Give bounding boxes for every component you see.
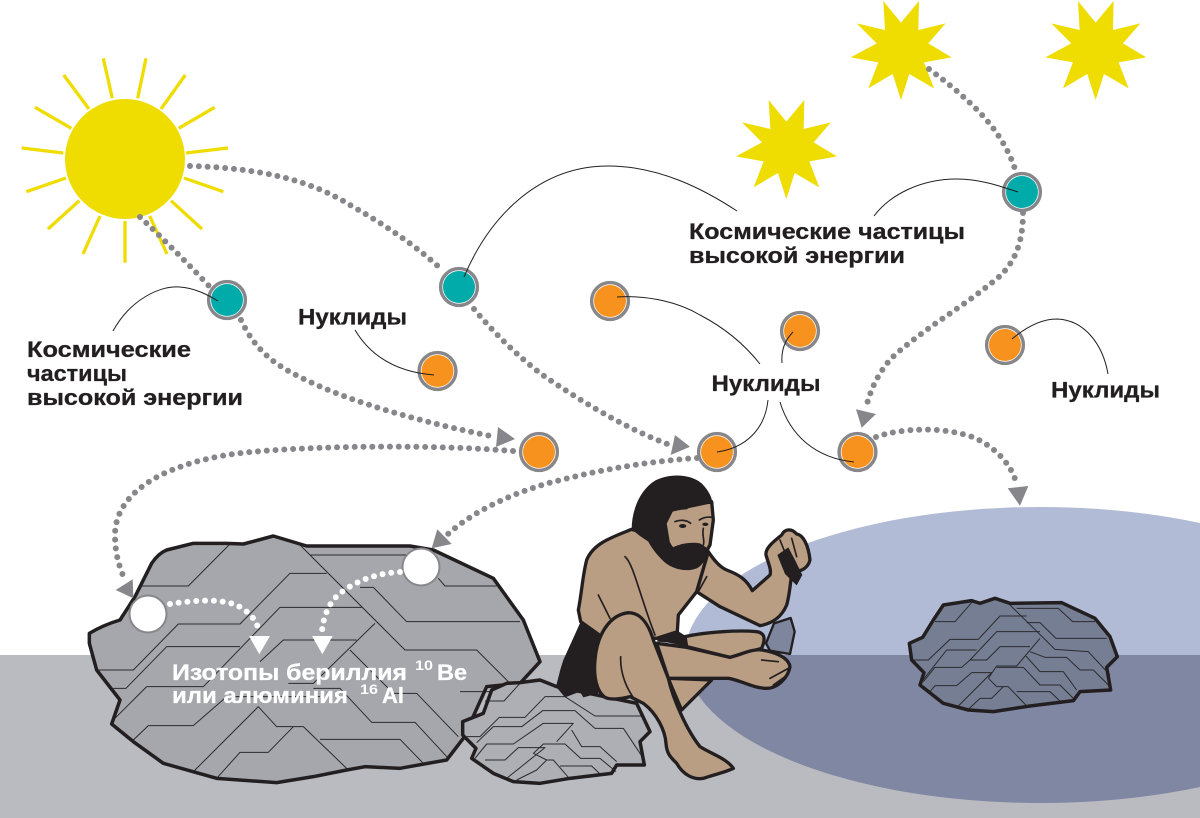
face details — [675, 517, 713, 554]
arrow: to nuclide left — [496, 427, 515, 447]
caveman — [556, 475, 810, 779]
fur loincloth — [556, 622, 602, 697]
front leg — [595, 613, 733, 779]
nuclide 4 — [782, 313, 818, 349]
label: isotopes — [172, 657, 467, 708]
nuclide 7 — [839, 434, 876, 470]
nuclide 3 — [521, 434, 557, 470]
torso — [578, 529, 708, 638]
hand stone — [766, 618, 795, 654]
front arm with hand — [657, 643, 790, 688]
head skin — [665, 502, 713, 560]
particle: teal right — [1004, 174, 1040, 210]
back leg — [668, 678, 712, 710]
dotted path: sun to centre particle — [190, 166, 441, 269]
dotted path: sun to particle — [140, 217, 210, 287]
white arrow right — [312, 636, 333, 654]
label: isotopes: или алюминия — [172, 683, 348, 708]
submerged rock — [909, 598, 1117, 712]
raised arm — [697, 530, 810, 626]
label: cosmic particles right — [689, 219, 965, 268]
label: cosmic particles left: Космические — [27, 337, 191, 362]
waist band — [657, 631, 687, 646]
dotted path: nuclide to lake — [876, 430, 1016, 482]
particle: teal left — [209, 282, 245, 318]
white arrow left — [249, 636, 270, 654]
dotted path: particle to right nuclide — [866, 213, 1023, 408]
label: nuclides centre: Нуклиды — [712, 371, 820, 396]
label: isotopes: Изотопы бериллия — [172, 660, 407, 685]
label: isotopes: 10 — [415, 657, 433, 673]
dotted path: nuclide to rock right — [448, 458, 697, 534]
leader lines — [113, 166, 1108, 462]
arrow: to lake — [1008, 486, 1028, 506]
label: cosmic particles right: высокой энергии — [689, 243, 905, 268]
label: isotopes: 16 — [360, 681, 378, 697]
label: isotopes: Al — [382, 683, 404, 708]
dotted path: star to particle — [929, 69, 1016, 172]
label: isotopes: Be — [437, 660, 467, 685]
dotted path: centre particle to nuclide — [474, 309, 670, 445]
thigh and forearm — [685, 631, 764, 657]
star: upper left — [851, 1, 952, 100]
nuclide 1 — [419, 353, 456, 389]
stone tool in fist — [777, 547, 802, 585]
nuclide 2 — [592, 283, 628, 319]
arrow: to centre nuclide — [671, 435, 690, 455]
label: cosmic particles left: высокой энергии — [27, 385, 243, 410]
large rock — [89, 536, 540, 783]
label: nuclides left: Нуклиды — [298, 304, 407, 330]
label: cosmic particles left — [27, 337, 243, 410]
particle: teal centre — [441, 269, 477, 305]
white dotted path right — [322, 572, 400, 631]
label: cosmic particles right: Космические частицы — [689, 219, 965, 244]
hair and beard — [632, 475, 713, 570]
star: upper right — [1045, 1, 1146, 100]
arrow: into rock right — [432, 529, 452, 548]
white dotted path left — [170, 601, 258, 628]
white isotope left — [130, 596, 166, 632]
arrow: to right nuclide — [856, 409, 876, 428]
dotted path: nuclide to rock left — [115, 447, 513, 578]
arrow: into rock left — [116, 579, 133, 598]
ground — [0, 655, 1200, 818]
body details — [598, 538, 797, 702]
star: centre — [736, 100, 837, 199]
nuclide 6 — [699, 434, 735, 470]
eyes — [679, 523, 708, 528]
label: cosmic particles left: частицы — [27, 361, 127, 386]
sun — [22, 58, 228, 263]
label: nuclides right: Нуклиды — [1051, 377, 1160, 402]
nuclide 5 — [987, 327, 1023, 363]
dotted path: particle to nuclide — [241, 320, 491, 436]
white isotope right — [402, 548, 440, 586]
small rock — [463, 680, 650, 783]
lake — [685, 507, 1200, 803]
